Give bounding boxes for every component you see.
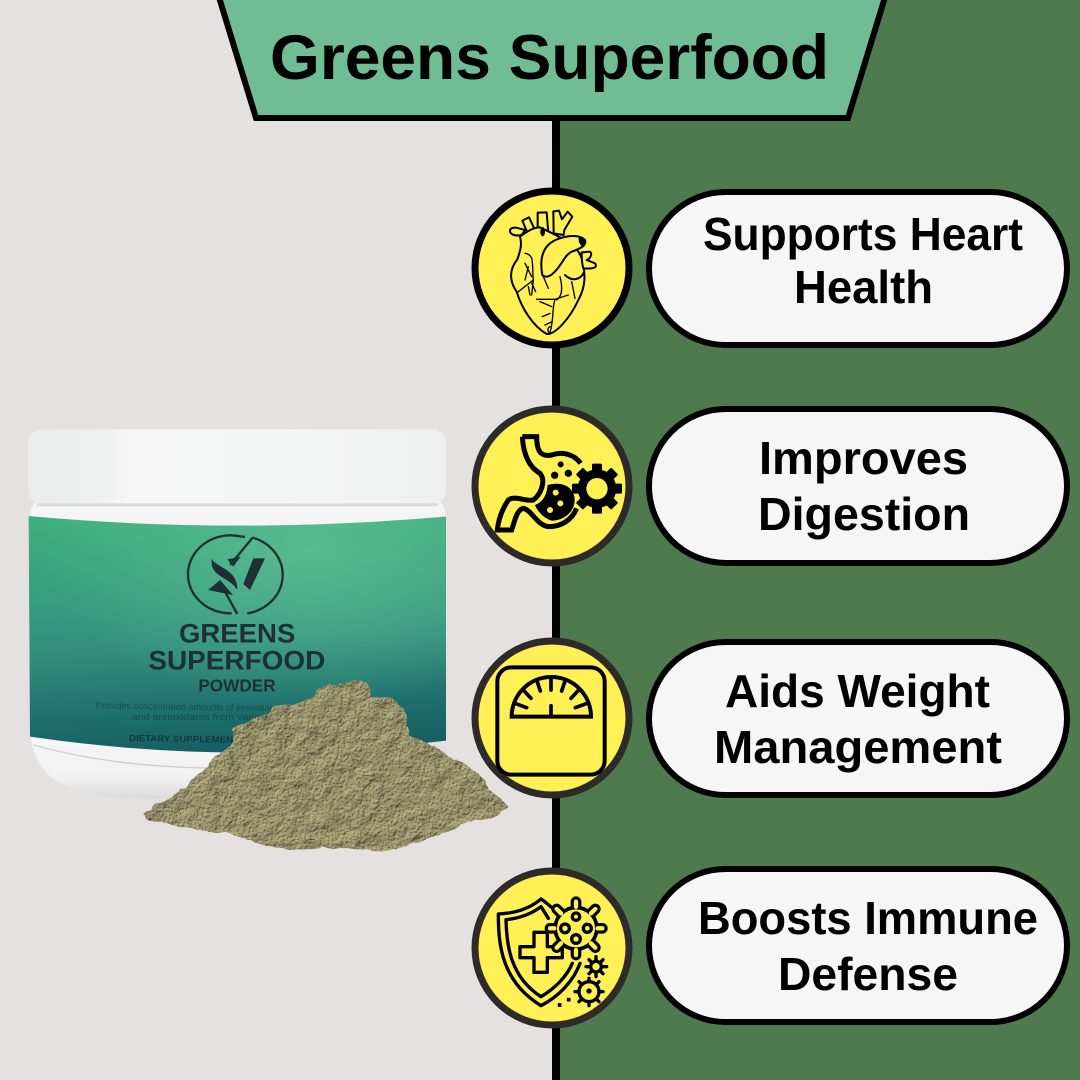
benefit pill: immune defense: Boosts Immune — [698, 892, 1038, 944]
jar label text: GREENS — [179, 619, 295, 649]
jar label — [29, 516, 446, 753]
benefit pill: heart health — [649, 192, 1067, 345]
jar label text: DIETARY SUPPLEMENT — [129, 733, 240, 745]
right background panel — [560, 0, 1080, 1080]
benefit pill: weight management — [649, 642, 1067, 795]
benefit pill: digestion: Digestion — [758, 488, 970, 540]
benefit pill: weight management: Aids Weight — [725, 665, 990, 717]
benefit pill: weight management: Management — [714, 721, 1002, 773]
icon circle: digestion — [475, 409, 629, 563]
benefit pill: immune defense: Defense — [778, 948, 958, 1000]
jar base — [30, 730, 445, 799]
icon: gear — [572, 464, 622, 514]
benefit pill: immune defense — [649, 869, 1067, 1022]
jar lid shadow — [37, 503, 438, 506]
icon circle: immune — [475, 871, 629, 1025]
jar label text — [96, 619, 325, 745]
benefit pill: digestion: Improves — [759, 432, 968, 484]
benefit pill: heart health: Supports Heart — [703, 208, 1023, 260]
jar neck — [30, 500, 446, 530]
title banner — [218, 0, 886, 118]
jar label text: SUPERFOOD — [148, 645, 325, 675]
brand logo — [188, 535, 283, 614]
product jar — [28, 429, 446, 799]
jar label text: POWDER — [198, 676, 276, 696]
benefit pill: heart health: Health — [794, 261, 933, 313]
jar lid — [28, 429, 446, 503]
jar label text: and antioxidants from various — [132, 712, 272, 722]
benefit pill: digestion — [649, 409, 1067, 563]
jar lower rim line — [33, 745, 233, 768]
icon circle: weight — [475, 641, 629, 795]
central vertical divider — [552, 100, 560, 1080]
virus outline — [550, 902, 602, 955]
icon circle: heart — [475, 191, 629, 345]
powder pile — [141, 680, 510, 852]
icon: anatomical heart — [510, 211, 596, 334]
title banner: Greens Superfood — [270, 23, 829, 93]
icon: bathroom scale — [497, 667, 605, 775]
icon: stomach with gear — [497, 437, 622, 530]
jar label text: Provides concentrated amounts of essential nutrients — [96, 700, 309, 714]
icon: shield with virus — [498, 899, 607, 1006]
left background panel — [0, 0, 552, 1080]
